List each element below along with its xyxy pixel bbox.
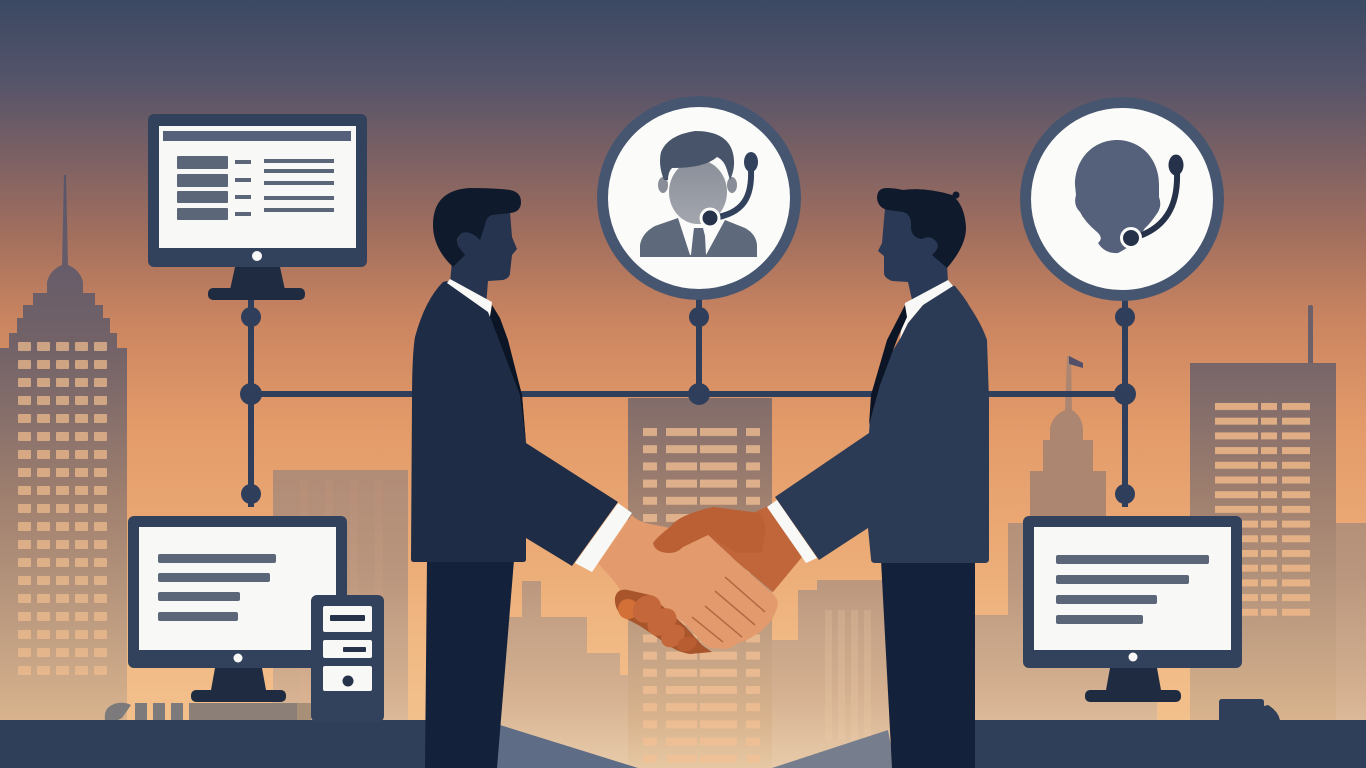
back of right hand: [708, 506, 802, 592]
monitor: bottom right: [1023, 516, 1242, 702]
trousers: [881, 560, 975, 768]
support icon: agent with suit: [602, 102, 796, 294]
mid-left building: [273, 470, 408, 720]
keyboard and mouse: [105, 703, 311, 720]
desktop tower: [311, 595, 384, 722]
hair mass: [877, 188, 966, 268]
jacket with arm: [775, 285, 989, 563]
jacket with arm: [411, 281, 618, 566]
connection network: [240, 295, 1136, 507]
low skyline behind handshake: [490, 580, 890, 768]
desk gadget right: [1219, 699, 1280, 720]
shirt collar: [900, 280, 953, 339]
trousers: [425, 560, 514, 768]
cuff: [767, 500, 817, 563]
man on left: [411, 188, 632, 768]
right tower with flag: [1030, 356, 1106, 530]
monitor: top left: [148, 114, 367, 300]
finger creases: [692, 577, 765, 642]
monitor: bottom left: [128, 516, 347, 702]
lower right building block: [1008, 523, 1157, 720]
left hand: [598, 515, 778, 649]
shirt collar: [447, 279, 497, 335]
hair: [433, 188, 521, 267]
ground band right: [968, 720, 1366, 768]
neck and head: [450, 210, 517, 306]
handshake: [598, 506, 802, 654]
building beside right man: [975, 615, 1015, 720]
city skyline: [0, 175, 1366, 768]
tie: [869, 305, 907, 425]
ground band left: [0, 720, 432, 768]
road right: [772, 730, 895, 768]
neck and head: [878, 205, 948, 300]
right skyscraper: [1190, 305, 1336, 720]
thumb of right hand: [653, 507, 765, 553]
lower fingers: [615, 589, 712, 654]
left skyscraper with spire: [0, 175, 127, 768]
far right building: [1336, 523, 1366, 720]
support icon: head silhouette: [1026, 102, 1218, 296]
road left: [490, 725, 638, 768]
tie: [490, 305, 526, 443]
hair knob: [952, 192, 960, 198]
cuff: [575, 503, 632, 572]
man on right: [767, 188, 989, 768]
center tower: [628, 398, 772, 768]
